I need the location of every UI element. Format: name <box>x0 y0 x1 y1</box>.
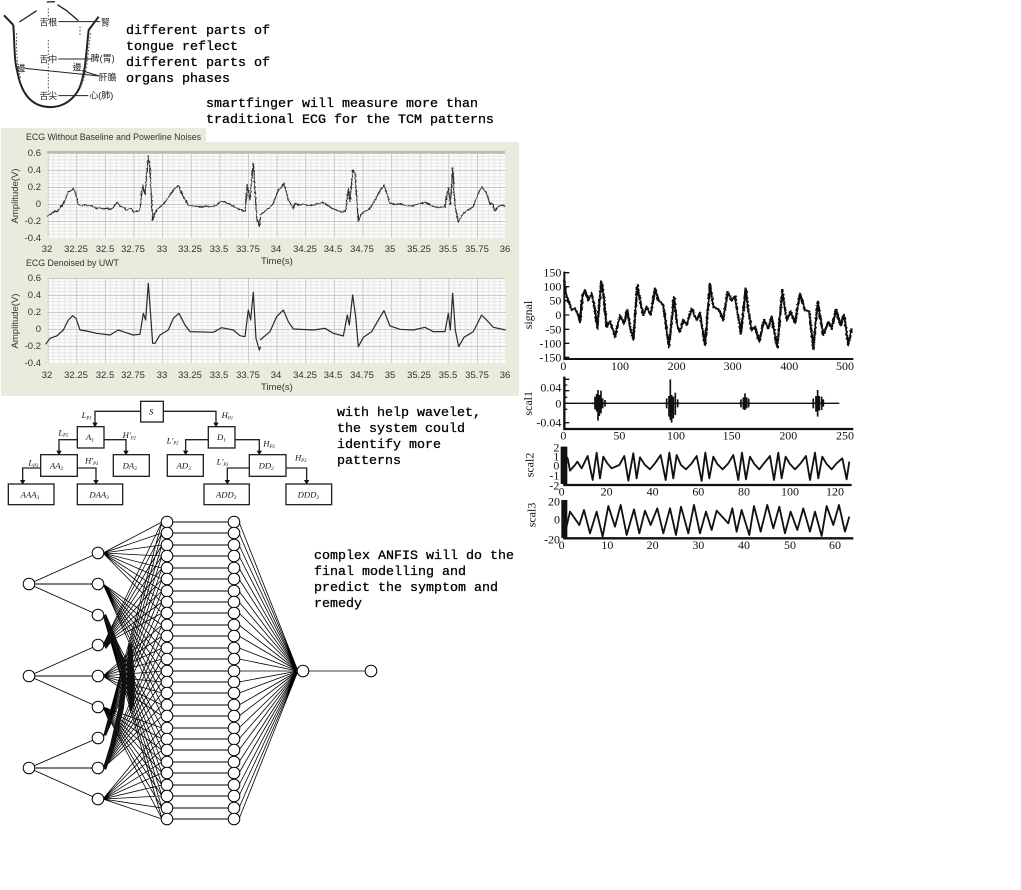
axis labels: 80 <box>738 485 750 499</box>
axis labels: 100 <box>781 485 799 499</box>
normalization links <box>167 522 234 819</box>
node labels: AAA <box>21 489 37 499</box>
axis labels: 0 <box>554 512 560 526</box>
text: wavelet note: the system could <box>337 422 465 437</box>
chart: scal1 <box>521 377 854 443</box>
panel: ECG charts <box>1 128 519 396</box>
filter labels: P1 <box>227 416 233 421</box>
text: tongue note: different parts of <box>126 24 270 39</box>
filter labels: H <box>222 410 228 420</box>
x axis labels: 33.25 <box>178 370 202 381</box>
organ labels: 邊 <box>17 62 26 73</box>
axis labels: 20 <box>647 538 659 552</box>
node labels: 3 <box>316 495 319 501</box>
text: ANFIS note: predict the symptom and <box>314 581 498 596</box>
axis labels: 0 <box>553 459 559 473</box>
node labels: 1 <box>91 438 94 444</box>
x axis labels: 33 <box>157 244 167 255</box>
x axis labels: 33.75 <box>236 244 260 255</box>
node labels: 3 <box>234 495 237 501</box>
filter labels: P3 <box>300 459 307 464</box>
x axis labels: 36 <box>500 244 510 255</box>
axis labels: -1 <box>549 469 559 483</box>
axis labels: 0 <box>555 396 561 410</box>
organ labels: 肝膽 <box>99 71 117 82</box>
node labels: A <box>86 432 91 442</box>
filter labels: P3 <box>92 462 99 467</box>
axis labels: 20 <box>601 485 613 499</box>
x axis labels: 35.75 <box>465 370 489 381</box>
filter labels: H <box>295 453 301 463</box>
filter labels: L' <box>167 435 173 445</box>
organ labels: 舌中 <box>39 54 57 65</box>
x axis labels: 35.5 <box>439 370 457 381</box>
y axis labels: 0.6 <box>28 273 41 284</box>
x axis labels: 34.5 <box>324 244 342 255</box>
text: ANFIS note: remedy <box>314 597 362 612</box>
filter labels: L <box>58 427 63 437</box>
text: smartfinger note: traditional ECG for the TCM patterns <box>206 113 494 128</box>
axis labels: 60 <box>692 485 704 499</box>
axis labels: -100 <box>539 336 561 350</box>
organ labels: 心(肺) <box>89 90 113 100</box>
text: wavelet note: identify more <box>337 438 441 453</box>
x axis labels: 34 <box>271 370 281 381</box>
y axis labels: 0 <box>36 324 41 335</box>
filter labels: P2 <box>130 436 137 441</box>
axis labels: -20 <box>544 532 560 546</box>
x axis labels <box>42 370 510 393</box>
node labels: 2 <box>188 466 191 472</box>
node labels: DAA <box>89 489 106 499</box>
axis labels: 40 <box>647 485 659 499</box>
tongue outline <box>4 15 99 107</box>
ECG trace 1 <box>47 156 506 227</box>
node labels: 2 <box>61 466 64 472</box>
node labels <box>20 407 319 501</box>
filter labels: P3 <box>32 464 39 469</box>
x axis labels: 36 <box>500 370 510 381</box>
axis labels: 20 <box>548 495 560 509</box>
axis labels: 200 <box>668 359 686 373</box>
text: tongue note: organs phases <box>126 72 230 87</box>
axis labels <box>522 440 844 499</box>
axis labels: 0.04 <box>540 380 561 394</box>
node labels: S <box>149 407 154 417</box>
output links <box>239 522 371 819</box>
x axis labels: 35.5 <box>439 244 457 255</box>
y axis labels: -0.2 <box>25 216 41 227</box>
axis labels: 1 <box>553 450 559 464</box>
axis labels: scal3 <box>524 503 538 527</box>
filter labels: P3 <box>269 445 275 450</box>
chart group: wavelet decomposition <box>521 266 854 552</box>
x axis labels: Time(s) <box>261 256 293 267</box>
x axis labels: 32.75 <box>121 370 145 381</box>
axis labels: 120 <box>826 485 844 499</box>
x axis labels: 33 <box>157 370 167 381</box>
filter labels: H <box>263 439 270 449</box>
axis labels: -50 <box>545 322 561 336</box>
filter labels: P2 <box>62 434 69 439</box>
organ labels: 舌尖 <box>39 90 57 101</box>
x axis labels: 35.75 <box>465 244 489 255</box>
axis labels: 0 <box>555 308 561 322</box>
axis labels: 0 <box>559 538 565 552</box>
x axis labels: 33.5 <box>210 370 228 381</box>
x axis labels: 33.25 <box>178 244 202 255</box>
axis labels: 30 <box>692 538 704 552</box>
axis labels: scal1 <box>521 391 535 416</box>
axis labels: 150 <box>543 266 561 280</box>
axis labels: 400 <box>780 359 798 373</box>
x axis labels: 35.25 <box>407 244 431 255</box>
text: wavelet note: patterns <box>337 454 401 469</box>
node labels: 3 <box>106 495 109 501</box>
chart: ECG without noise removal <box>10 148 510 267</box>
organ labels: 脾(胃) <box>91 53 115 64</box>
x axis labels: 34.75 <box>350 244 374 255</box>
node labels: AD <box>177 460 188 470</box>
filter labels: L <box>28 458 33 468</box>
axis labels: 50 <box>784 538 796 552</box>
axis labels: 60 <box>829 538 841 552</box>
axis labels: 250 <box>836 429 854 443</box>
axis labels: signal <box>521 300 535 329</box>
diagram: ANFIS network <box>23 516 377 825</box>
x axis labels: 34 <box>271 244 281 255</box>
axis labels: 100 <box>543 280 561 294</box>
dense line bundles <box>103 614 135 770</box>
node labels: DDD <box>298 489 316 499</box>
node labels: AA <box>50 460 61 470</box>
text: smartfinger note: smartfinger will measure more than <box>206 97 478 112</box>
x axis labels: Time(s) <box>261 382 293 393</box>
x axis labels: 32 <box>42 244 52 255</box>
axis labels: -0.04 <box>536 416 561 430</box>
axis labels: 50 <box>613 429 625 443</box>
heading: first ECG chart: ECG Without Baseline and Powerline Noises <box>26 132 202 142</box>
connectors <box>23 411 307 483</box>
axis labels: 50 <box>549 294 561 308</box>
organ labels <box>17 17 117 101</box>
y axis labels <box>10 273 41 369</box>
x axis labels: 34.5 <box>324 370 342 381</box>
network nodes <box>23 516 377 825</box>
filter labels: P1 <box>85 416 92 421</box>
filter labels <box>27 410 307 469</box>
x axis labels: 32.5 <box>96 244 114 255</box>
y axis labels: Amplitude(V) <box>10 294 21 348</box>
y axis labels: 0.4 <box>28 165 41 176</box>
tree nodes <box>8 401 332 505</box>
rule connections <box>103 522 162 819</box>
y axis labels: -0.4 <box>25 358 41 369</box>
ECG trace 2 <box>46 283 506 350</box>
node labels: D <box>217 432 223 442</box>
axis labels <box>521 266 854 373</box>
icon: tongue diagram <box>4 2 117 107</box>
axis labels: -150 <box>539 350 561 364</box>
text: tongue note: tongue reflect <box>126 40 238 55</box>
axis labels <box>521 380 854 443</box>
node labels: DD <box>259 460 271 470</box>
text: ANFIS note: complex ANFIS will do the <box>314 549 514 564</box>
chart: scal2 <box>522 440 852 499</box>
input connections <box>29 553 98 799</box>
axis labels: scal2 <box>522 453 536 477</box>
axis labels: 40 <box>738 538 750 552</box>
x axis labels: 32.5 <box>96 370 114 381</box>
chart: signal <box>521 266 854 373</box>
y axis labels: 0.2 <box>28 182 41 193</box>
axis labels: 300 <box>724 359 742 373</box>
node labels: 2 <box>271 466 274 472</box>
axis labels: 2 <box>553 440 559 454</box>
chart: ECG denoised by UWT <box>10 273 510 393</box>
text: tongue note: different parts of <box>126 56 270 71</box>
axis labels <box>524 495 841 552</box>
x axis labels: 34.25 <box>293 370 317 381</box>
heading: second ECG chart: ECG Denoised by UWT <box>26 258 120 268</box>
organ labels: 腎 <box>101 18 110 28</box>
x axis labels: 32.25 <box>64 244 88 255</box>
y axis labels: 0.6 <box>28 148 41 159</box>
x axis labels: 33.5 <box>210 244 228 255</box>
x axis labels: 33.75 <box>236 370 260 381</box>
filter labels: H' <box>85 456 93 466</box>
node labels: 1 <box>223 438 226 444</box>
filter labels: L' <box>217 457 223 467</box>
axis labels: 0 <box>559 485 565 499</box>
x axis labels: 35.25 <box>407 370 431 381</box>
y axis labels: Amplitude(V) <box>10 169 21 223</box>
y axis labels: -0.4 <box>25 233 41 244</box>
diagram: wavelet packet tree <box>8 401 332 505</box>
axis labels: 0 <box>560 359 566 373</box>
x axis labels: 35 <box>385 244 395 255</box>
node labels: 3 <box>37 495 40 501</box>
x axis labels: 34.25 <box>293 244 317 255</box>
text: wavelet note: with help wavelet, <box>337 406 481 421</box>
filter labels: L <box>82 410 86 420</box>
axis labels: 10 <box>601 538 613 552</box>
axis labels: 150 <box>723 429 741 443</box>
filter labels: P2 <box>172 442 179 447</box>
organ labels: 邊 <box>73 62 82 73</box>
y axis labels <box>10 148 41 244</box>
x axis labels: 35 <box>385 370 395 381</box>
filter labels: P3 <box>222 463 229 468</box>
text: ANFIS note: final modelling and <box>314 565 466 580</box>
node labels: ADD <box>216 489 234 499</box>
axis labels: 100 <box>611 359 629 373</box>
node labels: DA <box>123 460 134 470</box>
y axis labels: 0 <box>36 199 41 210</box>
x axis labels: 34.75 <box>350 370 374 381</box>
x axis labels: 32.25 <box>64 370 88 381</box>
node labels: 2 <box>134 466 137 472</box>
y axis labels: -0.2 <box>25 341 41 352</box>
axis labels: -2 <box>549 478 559 492</box>
y axis labels: 0.4 <box>28 290 41 301</box>
y axis labels: 0.2 <box>28 307 41 318</box>
axis labels: 100 <box>667 429 685 443</box>
chart: scal3 <box>524 495 853 552</box>
axis labels: 0 <box>560 429 566 443</box>
axis labels: 200 <box>779 429 797 443</box>
axis labels: 500 <box>836 359 854 373</box>
x axis labels: 32 <box>42 370 52 381</box>
organ labels: 舌根 <box>39 17 57 28</box>
filter labels: H' <box>123 430 131 440</box>
x axis labels <box>42 244 510 267</box>
x axis labels: 32.75 <box>121 244 145 255</box>
